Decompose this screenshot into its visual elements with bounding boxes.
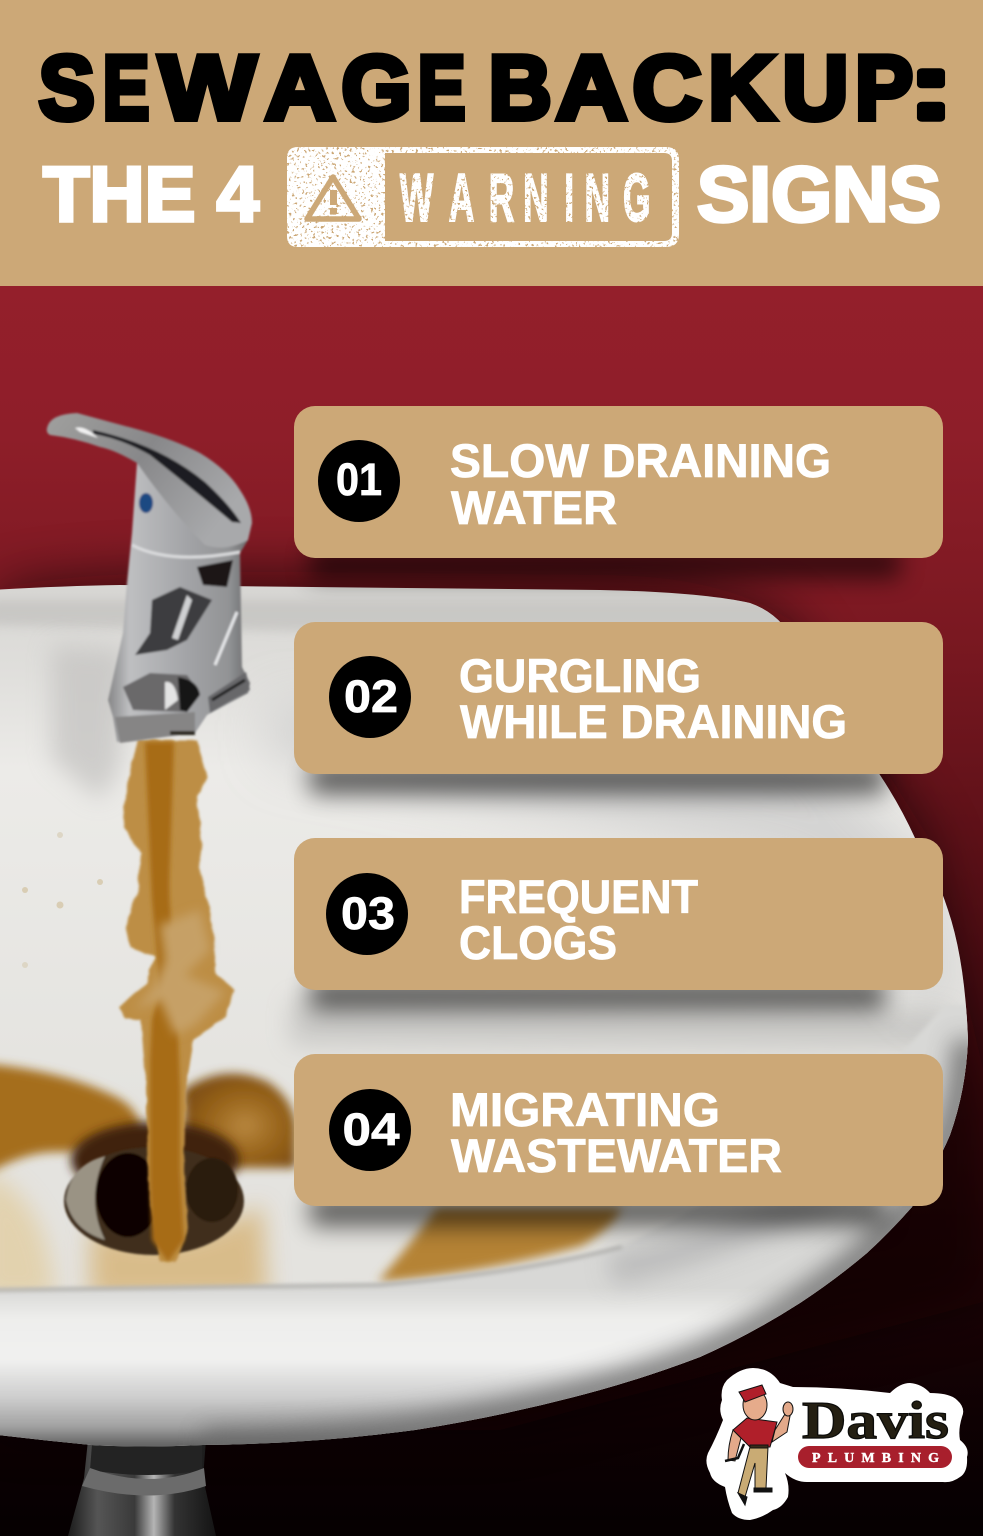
stain: right pool bbox=[183, 1074, 296, 1168]
sink photo bbox=[0, 413, 983, 1536]
basin shading bbox=[0, 600, 960, 1050]
text: frequent clogs: FREQUENT bbox=[459, 870, 698, 923]
sink body bbox=[0, 580, 983, 1480]
faucet blue dot bbox=[139, 493, 153, 513]
faucet bbox=[47, 413, 252, 743]
sticker backing bbox=[706, 1368, 968, 1520]
logo pill: plumbing: PLUMBING bbox=[812, 1451, 939, 1466]
faucet nozzle bbox=[123, 673, 200, 712]
number badge 02 bbox=[329, 656, 411, 738]
faucet collar bbox=[132, 545, 240, 557]
faucet tip highlight bbox=[75, 427, 98, 438]
rim sweep shading bbox=[604, 1206, 832, 1288]
text: gurgling while draining: GURGLING bbox=[459, 649, 701, 702]
title: sewage backup: C bbox=[632, 38, 702, 139]
warning stamp bbox=[287, 147, 679, 247]
icon: warning triangle bbox=[307, 177, 359, 219]
stain: lower wash drain bbox=[90, 1205, 268, 1300]
rim outer edge shading bbox=[203, 1040, 967, 1445]
title: sewage backup: S bbox=[39, 38, 95, 139]
title: sewage backup: W bbox=[159, 38, 256, 139]
text: migrating wastewater bbox=[450, 1083, 782, 1182]
stain: left pool bbox=[0, 1063, 141, 1178]
text: frequent clogs: CLOGS bbox=[459, 916, 617, 969]
faucet handle dark stripe bbox=[93, 430, 241, 523]
number badge 02: 02 bbox=[344, 671, 398, 722]
faucet handle bbox=[47, 413, 252, 548]
text: gurgling while draining: WHILE DRAINING bbox=[460, 695, 847, 748]
title: sewage backup: G bbox=[342, 38, 412, 139]
stain: lower wash left bbox=[0, 1170, 55, 1300]
panel: sign 01 bbox=[294, 406, 943, 578]
stain: drain halo bbox=[71, 1122, 239, 1198]
rim inner crease shadow bbox=[0, 1247, 622, 1290]
subtitle: the 4: THE 4 bbox=[43, 150, 259, 238]
text: slow draining water: WATER bbox=[451, 481, 617, 534]
stream core bbox=[145, 742, 184, 1262]
title: sewage backup: B bbox=[489, 38, 552, 139]
panel: sign 02 bbox=[294, 622, 943, 794]
stain: lower right bbox=[378, 1208, 622, 1282]
text: migrating wastewater: WASTEWATER bbox=[451, 1129, 782, 1182]
text: frequent clogs bbox=[459, 870, 698, 969]
title: sewage backup: E bbox=[103, 38, 149, 139]
title: sewage backup: P bbox=[855, 38, 913, 139]
header band bbox=[0, 0, 983, 286]
number badge 03 bbox=[326, 873, 408, 955]
warning word: WARNING bbox=[400, 161, 650, 236]
panel: sign 04 bbox=[294, 1054, 943, 1226]
text: slow draining water bbox=[450, 434, 831, 534]
text: slow draining water: SLOW DRAINING bbox=[450, 434, 831, 487]
title: sewage backup: K bbox=[708, 38, 775, 139]
number badge 04: 04 bbox=[342, 1104, 400, 1155]
number badge 01: 01 bbox=[336, 454, 382, 505]
pedestal bbox=[68, 1440, 216, 1536]
title: sewage backup: : bbox=[910, 37, 952, 138]
title: sewage backup: U bbox=[782, 38, 848, 139]
halo shadow behind sink bbox=[0, 572, 983, 1430]
subtitle: signs: SIGNS bbox=[697, 150, 941, 238]
logo word: davis: Davis bbox=[802, 1392, 949, 1450]
panel: sign 03 bbox=[294, 838, 943, 1010]
text: gurgling while draining bbox=[459, 649, 847, 748]
basin rim front bbox=[0, 1005, 983, 1480]
logo: davis plumbing bbox=[706, 1368, 968, 1520]
title: sewage backup: E bbox=[418, 38, 465, 139]
drain bbox=[64, 1147, 244, 1255]
text: migrating wastewater: MIGRATING bbox=[450, 1083, 720, 1136]
mascot bbox=[725, 1385, 793, 1505]
water stream bbox=[118, 740, 235, 1262]
number badge 03: 03 bbox=[341, 888, 395, 939]
title: sewage backup: A bbox=[556, 38, 627, 139]
logo pill: plumbing bbox=[798, 1446, 952, 1468]
number badge 01 bbox=[318, 440, 400, 522]
number badge 04 bbox=[329, 1089, 411, 1171]
title: sewage backup: A bbox=[265, 38, 335, 139]
stream pale foam bbox=[135, 910, 225, 1035]
